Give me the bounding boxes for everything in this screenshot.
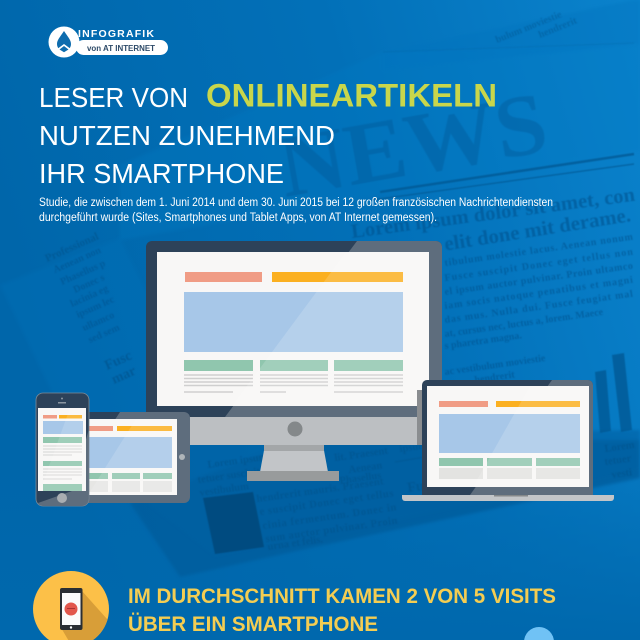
newspaper article text: hendrerit [537, 15, 579, 41]
newspaper article text: ipsum [399, 440, 428, 455]
newspaper article text: lacinia eg [69, 283, 110, 310]
monitor text lines [184, 375, 403, 392]
newspaper article text: Aenean [348, 460, 383, 476]
newspaper article text: Fu [406, 479, 425, 496]
newspaper article text: urna et felis. [267, 534, 324, 553]
intro text [39, 197, 553, 224]
icon: smartphone in yellow circle [33, 571, 115, 640]
newspaper article text: e suscipit Donec eget tellus [259, 488, 394, 518]
newspaper article text: Aenean non [52, 245, 103, 276]
newspaper article text: s pharetra magna. [444, 330, 523, 352]
logo leaf icon [56, 31, 72, 54]
newspaper article text: Lorem ipsum [207, 452, 268, 471]
newspaper article text: el ipsum auctor pulvinar. Proin ultamco [444, 261, 634, 298]
monitor stand [260, 445, 328, 472]
newspaper article text: tetuer [604, 453, 632, 468]
newspaper article text: das mus. Nulla dui. Fusce feugiat mal [444, 289, 634, 326]
smartphone [36, 393, 89, 506]
newspaper article text: Phasellus [339, 470, 382, 487]
newspaper article text: lit. Praesent [334, 446, 389, 464]
section heading with smartphone icon: ÜBER EIN SMARTPHONE [128, 613, 378, 636]
heading: IM DURCHSCHNITT KAMEN 2 VON 5 VISITS [128, 585, 556, 608]
newspaper article text: Professional [43, 230, 101, 265]
newspaper article text: sum auctor pulvinar. Proin [265, 516, 398, 545]
title: LESER VON [39, 82, 188, 113]
newspaper article text: mar [110, 364, 138, 388]
newspaper article text: tetuer suscipit [197, 466, 261, 486]
newspaper article text: ullamco [81, 310, 116, 334]
monitor screen [157, 252, 429, 406]
newspaper article text: ipsum lec [75, 294, 117, 321]
newspaper article text: ac vestibulum moviestie [444, 353, 547, 378]
intro text: durchgeführt wurde (Sites, Smartphones und Tablet Apps, von AT Internet gemessen). [39, 212, 437, 224]
newspaper article text: at, cursus nec, luctus a, lorem. Maece [444, 307, 604, 340]
logo circle [48, 26, 80, 58]
newspaper article text: tibulum molestie lacus. Aenean nonum [444, 232, 634, 269]
masthead rules [372, 43, 634, 200]
title [39, 78, 497, 189]
newspaper article text: sed sem [87, 322, 122, 346]
monitor chin [146, 417, 442, 445]
newspaper article text: Phasellus p [59, 258, 108, 288]
bar chart in newspaper [595, 370, 611, 433]
monitor frame [146, 241, 442, 417]
logo pill [76, 40, 168, 55]
newspaper article text [43, 9, 636, 554]
newspaper article text: bulum moviestie [494, 9, 564, 46]
title: NUTZEN ZUNEHMEND [39, 120, 335, 151]
newspaper article text: g elit done mit derame. [427, 204, 632, 258]
newspaper article text: vesti [611, 467, 633, 481]
title: ONLINEARTIKELN [206, 78, 497, 114]
newspaper article text: Fusce suscipit Donec eget tellus non [444, 247, 634, 284]
logo title: INFOGRAFIK [78, 28, 154, 40]
logo subtitle: von AT INTERNET [87, 44, 155, 53]
newspaper article text: Lorem ipsum dolor sit amet, con [350, 184, 636, 243]
monitor screen shine [232, 252, 429, 406]
laptop [402, 380, 614, 501]
newspaper article text: Lorem [604, 440, 636, 455]
newspaper photo block [203, 492, 264, 554]
intro text: Studie, die zwischen dem 1. Juni 2014 und dem 30. Juni 2015 bei 12 großen französischen Nachrichtendiensten [39, 197, 553, 209]
desktop monitor [146, 241, 442, 481]
newspaper article text: vestibulum [199, 481, 250, 499]
tablet [60, 412, 190, 503]
logo [48, 26, 168, 58]
newspaper article text: hendrerit [474, 369, 516, 386]
newspaper article text: Fusc [103, 349, 134, 374]
newspaper article text: Donec s [72, 272, 107, 296]
section heading with smartphone icon [33, 571, 556, 640]
newspaper article text: cinia fermentum. Donec in [262, 502, 397, 532]
newspaper article text: iam socis natoque penatibus et magni [444, 275, 634, 312]
newspaper masthead: NEWS [272, 74, 554, 217]
title: IHR SMARTPHONE [39, 158, 284, 189]
newspaper article text: hendrerit mauris. Praesent [256, 476, 385, 505]
light blue circle [524, 627, 554, 640]
